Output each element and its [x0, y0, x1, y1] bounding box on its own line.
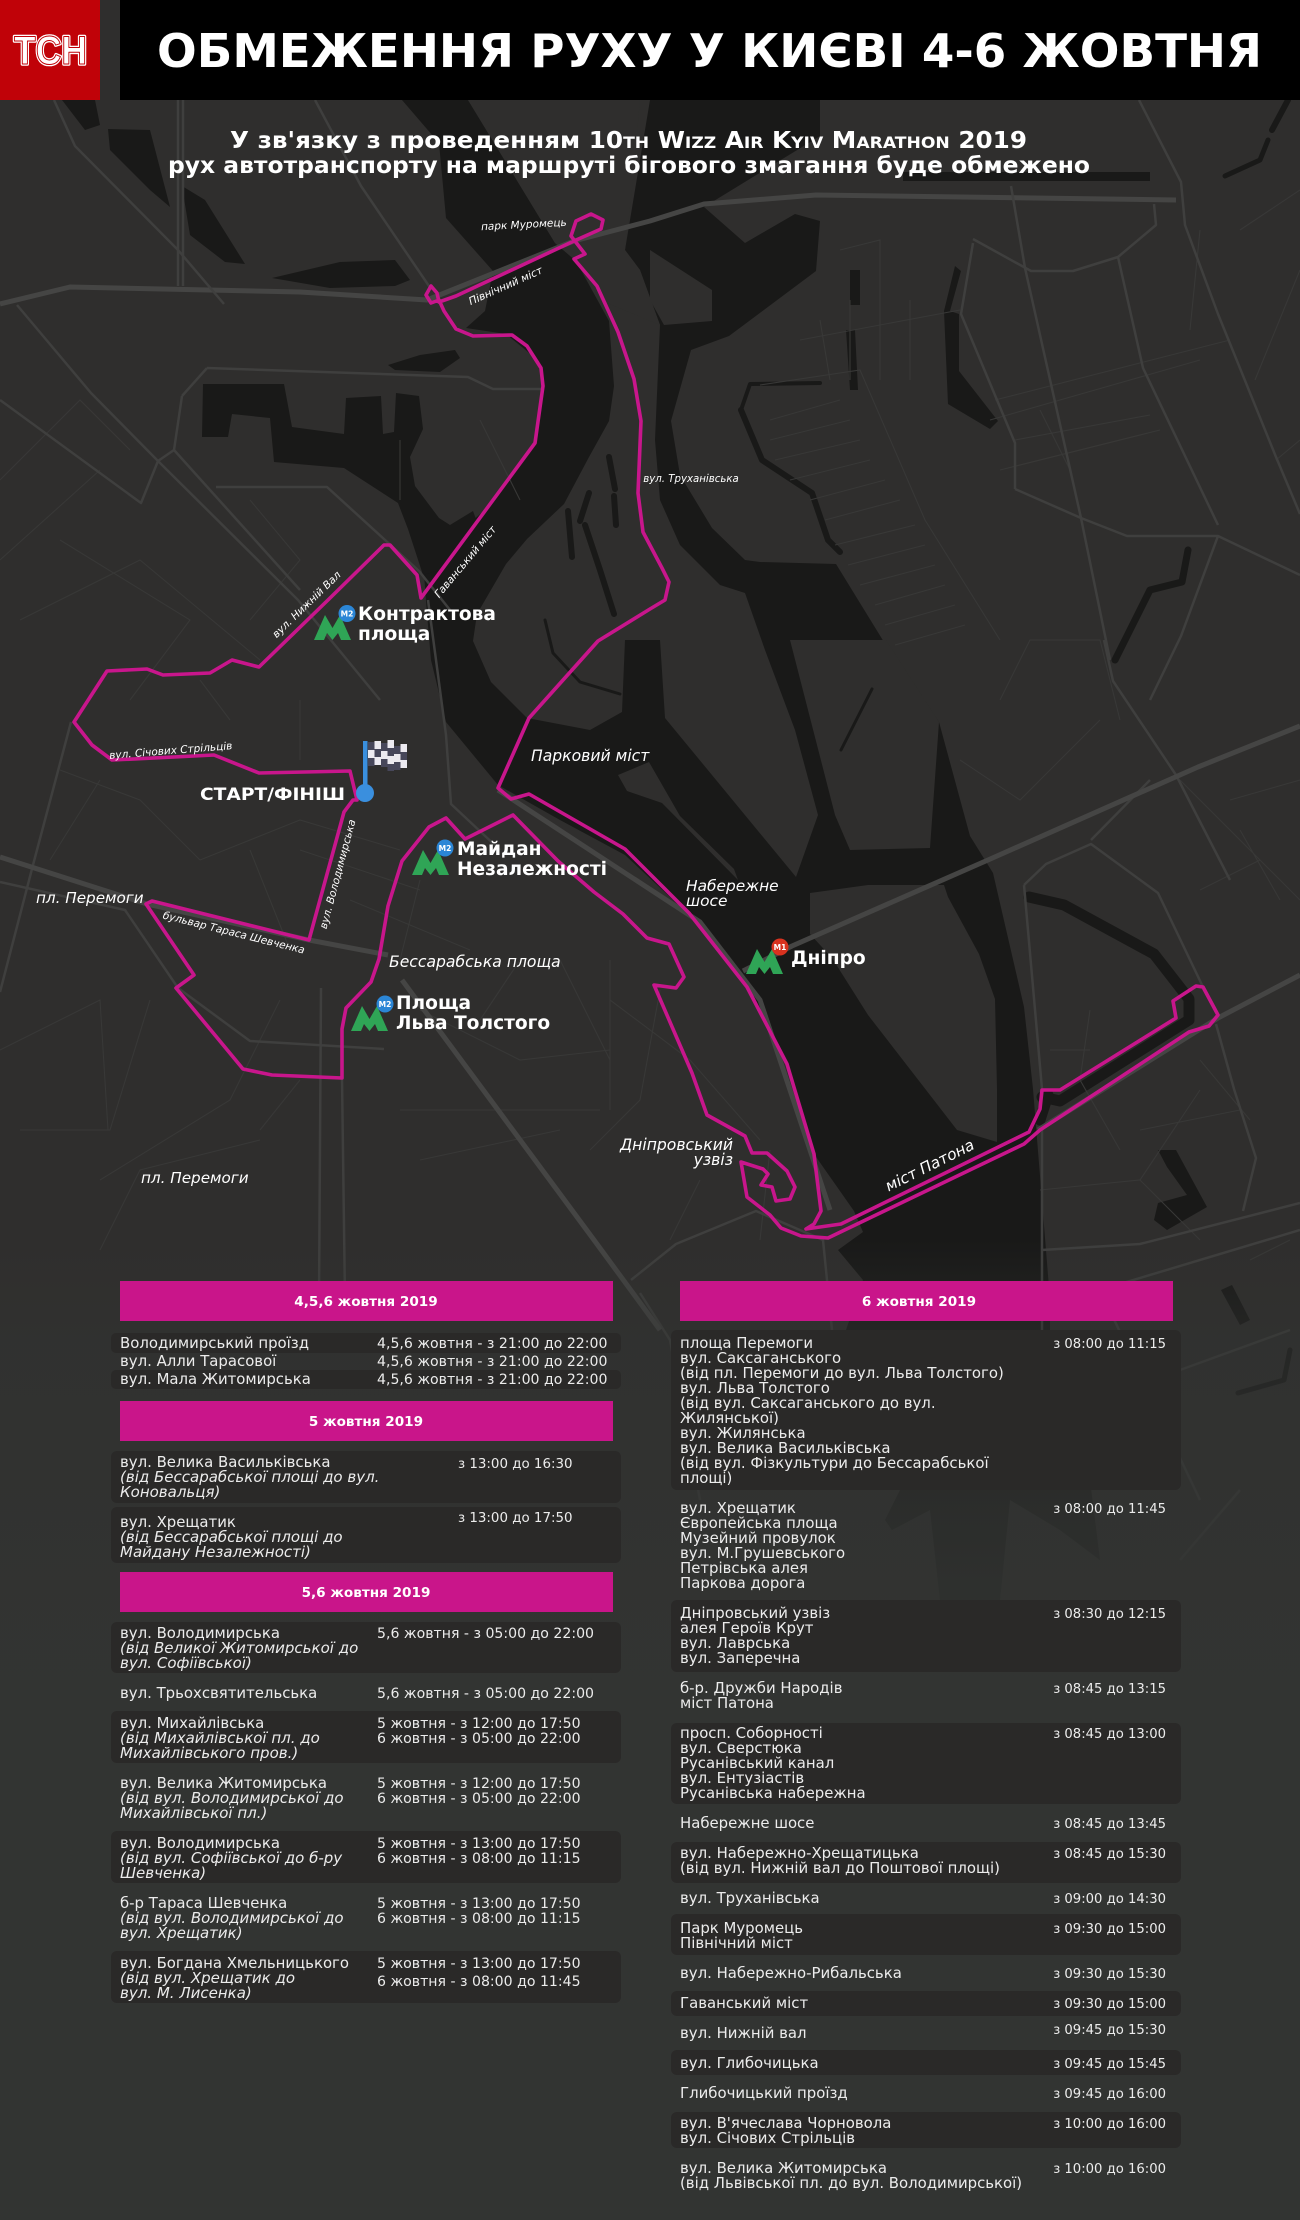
start / finish marker: [200, 740, 407, 805]
metro: Площа Льва Толстого: Площа: [396, 993, 471, 1014]
map street labels: [36, 217, 977, 1195]
table: 5,6 жовтня: 5 жовтня - з 12:00 до 17:50: [377, 1716, 581, 1732]
table: 6 жовтня: вул. Ентузіастів: [680, 1769, 804, 1787]
table: 5 жовтня: (від Бессарабської площі до вул.: [120, 1468, 379, 1486]
metro: Площа Льва Толстого: [351, 993, 550, 1034]
table: 6 жовтня: з 08:00 до 11:15: [1053, 1337, 1166, 1352]
table: 6 жовтня: з 08:45 до 13:45: [1053, 1817, 1166, 1832]
table: 5,6 жовтня: вул. Богдана Хмельницького: [120, 1954, 349, 1972]
table: 5 жовтня: з 13:00 до 17:50: [458, 1511, 573, 1526]
table: 5,6 жовтня: 5 жовтня - з 13:00 до 17:50: [377, 1896, 581, 1912]
metro: Контрактова площа: [314, 604, 496, 645]
metro: Контрактова площа: площа: [358, 624, 430, 645]
table: 6 жовтня: з 09:45 до 16:00: [1053, 2087, 1166, 2102]
table: 6 жовтня: (від вул. Нижній вал до Поштової площі): [680, 1859, 1000, 1877]
map street labels: парк Муромець: [481, 217, 567, 233]
table: 6 жовтня: вул. В'ячеслава Чорновола: [680, 2114, 891, 2132]
table: 6 жовтня: 6 жовтня 2019: [862, 1294, 976, 1310]
metro: Площа Льва Толстого: Льва Толстого: [396, 1013, 550, 1034]
table: 6 жовтня: б-р. Дружби Народів: [680, 1679, 842, 1697]
table: 5,6 жовтня: (від вул. Володимирської до: [120, 1909, 344, 1927]
table: 5,6 жовтня: (від Великої Житомирської до: [120, 1639, 358, 1657]
table: 6 жовтня: з 09:45 до 15:45: [1053, 2057, 1166, 2072]
table: 5,6 жовтня: вул. Трьохсвятительська: [120, 1684, 317, 1702]
map street labels: Дніпровський: [619, 1136, 733, 1154]
table: 5,6 жовтня: 5,6 жовтня - з 05:00 до 22:00: [377, 1686, 594, 1702]
table: 4,5,6 жовтня: [111, 1281, 621, 1389]
metro: Дніпро: Дніпро: [791, 948, 866, 969]
map street labels: вул. Нижній Вал: [270, 569, 344, 641]
start / finish marker: СТАРТ/ФІНІШ: [200, 785, 345, 805]
table: 6 жовтня: з 09:30 до 15:30: [1053, 1967, 1166, 1982]
table: 5 жовтня: Коновальця): [120, 1483, 220, 1501]
table: 6 жовтня: просп. Соборності: [680, 1724, 823, 1742]
subtitle: У зв'язку з проведенням 10 th Wizz Air Kyiv Marathon 2019: [230, 128, 1027, 154]
table: 5 жовтня: 5 жовтня 2019: [309, 1414, 423, 1430]
metro: Контрактова площа: Контрактова: [358, 604, 496, 625]
table: 6 жовтня: Набережне шосе: [680, 1814, 814, 1832]
islands over water: [468, 100, 997, 1142]
table: 5,6 жовтня: (від Михайлівської пл. до: [120, 1729, 320, 1747]
map street labels: Північний міст: [467, 264, 545, 308]
table: 6 жовтня: Парк Муромець: [680, 1919, 803, 1937]
header: TSN logo: [0, 0, 100, 100]
map street labels: міст Патона: [882, 1136, 977, 1195]
table: 5,6 жовтня: 6 жовтня - з 08:00 до 11:45: [377, 1974, 581, 1990]
table: 6 жовтня: Русанівська набережна: [680, 1784, 866, 1802]
table: 5,6 жовтня: Михайлівської пл.): [120, 1804, 267, 1822]
table: 6 жовтня: вул. Набережно-Хрещатицька: [680, 1844, 919, 1862]
table: 6 жовтня: з 09:30 до 15:00: [1053, 1922, 1166, 1937]
table: 6 жовтня: Європейська площа: [680, 1514, 838, 1532]
table: 5 жовтня: вул. Хрещатик: [120, 1513, 236, 1531]
table: 5,6 жовтня: 5,6 жовтня 2019: [302, 1585, 430, 1601]
table: 6 жовтня: Жилянської): [680, 1409, 779, 1427]
table: 5,6 жовтня: Шевченка): [120, 1864, 206, 1882]
metro: Майдан Незалежності: M2: [439, 844, 451, 853]
table: 4,5,6 жовтня: 4,5,6 жовтня - з 21:00 до 22:00: [377, 1372, 607, 1388]
table: 6 жовтня: вул. Велика Житомирська: [680, 2159, 887, 2177]
table: 5,6 жовтня: [111, 1572, 621, 2003]
table: 6 жовтня: з 08:45 до 15:30: [1053, 1847, 1166, 1862]
table: 6 жовтня: (від пл. Перемоги до вул. Льва Толстого): [680, 1364, 1004, 1382]
table: 5,6 жовтня: 5 жовтня - з 12:00 до 17:50: [377, 1776, 581, 1792]
metro: Дніпро: [746, 938, 866, 974]
table: 6 жовтня: Русанівський канал: [680, 1754, 834, 1772]
table: 5,6 жовтня: Михайлівського пров.): [120, 1744, 298, 1762]
table: 4,5,6 жовтня: 4,5,6 жовтня - з 21:00 до 22:00: [377, 1336, 607, 1352]
table: 6 жовтня: Гаванський міст: [680, 1994, 808, 2012]
table: 6 жовтня: (від вул. Саксаганського до вул.: [680, 1394, 936, 1412]
table: 6 жовтня: (від Львівської пл. до вул. Володимирської): [680, 2174, 1022, 2192]
table: 6 жовтня: з 09:30 до 15:00: [1053, 1997, 1166, 2012]
table: 6 жовтня: вул. Лаврська: [680, 1634, 790, 1652]
table: 6 жовтня: вул. Сверстюка: [680, 1739, 802, 1757]
metro: Майдан Незалежності: [412, 839, 607, 880]
table: 4,5,6 жовтня: 4,5,6 жовтня - з 21:00 до 22:00: [377, 1354, 607, 1370]
subtitle: рух автотранспорту на маршруті бігового змагання буде обмежено: [168, 153, 1090, 179]
table: 6 жовтня: з 09:00 до 14:30: [1053, 1892, 1166, 1907]
metro: Дніпро: M1: [774, 943, 786, 952]
table: 6 жовтня: з 08:45 до 13:00: [1053, 1727, 1166, 1742]
bottom fade overlay: [0, 1240, 1300, 2220]
table: 6 жовтня: площі): [680, 1469, 732, 1487]
table: 6 жовтня: Дніпровський узвіз: [680, 1604, 830, 1622]
table: 6 жовтня: алея Героїв Крут: [680, 1619, 814, 1637]
table: 6 жовтня: вул. Труханівська: [680, 1889, 820, 1907]
metro: Контрактова площа: M2: [341, 610, 353, 618]
table: 5,6 жовтня: 5,6 жовтня - з 05:00 до 22:00: [377, 1626, 594, 1642]
table: 6 жовтня: міст Патона: [680, 1694, 774, 1712]
table: 6 жовтня: Петрівська алея: [680, 1559, 808, 1577]
table: 5,6 жовтня: 5 жовтня - з 13:00 до 17:50: [377, 1956, 581, 1972]
table: 5 жовтня: Майдану Незалежності): [120, 1543, 311, 1561]
table: 6 жовтня: Музейний провулок: [680, 1529, 836, 1547]
metro: Площа Льва Толстого: M2: [379, 1000, 391, 1009]
metro: Майдан Незалежності: Незалежності: [457, 859, 607, 880]
header: TSN logo: ТСН: [14, 29, 87, 73]
table: 5,6 жовтня: вул. Софіївської): [120, 1654, 252, 1672]
table: 5,6 жовтня: (від вул. Хрещатик до: [120, 1969, 295, 1987]
table: 4,5,6 жовтня: Володимирський проїзд: [120, 1334, 309, 1352]
map street labels: вул. Володимирська: [318, 818, 358, 930]
map street labels: Бессарабська площа: [389, 953, 561, 971]
header: title: ОБМЕЖЕННЯ РУХУ У КИЄВІ 4-6 ЖОВТНЯ: [157, 24, 1262, 78]
table: 6 жовтня: вул. Жилянська: [680, 1424, 806, 1442]
table: 6 жовтня: вул. Заперечна: [680, 1649, 800, 1667]
map street labels: узвіз: [693, 1151, 733, 1169]
table: 6 жовтня: Паркова дорога: [680, 1574, 805, 1592]
table: 6 жовтня: з 09:45 до 15:30: [1053, 2023, 1166, 2038]
table: 5,6 жовтня: 6 жовтня - з 08:00 до 11:15: [377, 1911, 581, 1927]
map street labels: пл. Перемоги: [141, 1169, 249, 1187]
table: 5,6 жовтня: 6 жовтня - з 05:00 до 22:00: [377, 1731, 581, 1747]
table: 4,5,6 жовтня: вул. Мала Житомирська: [120, 1370, 311, 1388]
table: 6 жовтня: з 10:00 до 16:00: [1053, 2117, 1166, 2132]
table: 6 жовтня: з 08:30 до 12:15: [1053, 1607, 1166, 1622]
table: 6 жовтня: з 10:00 до 16:00: [1053, 2162, 1166, 2177]
map street labels: Гаванський міст: [432, 523, 500, 600]
table: 6 жовтня: Північний міст: [680, 1934, 793, 1952]
table: 6 жовтня: Глибочицький проїзд: [680, 2084, 848, 2102]
map street labels: вул. Труханівська: [643, 473, 739, 485]
table: 5 жовтня: [111, 1401, 621, 1563]
table: 4,5,6 жовтня: вул. Алли Тарасової: [120, 1352, 277, 1370]
table: 5,6 жовтня: вул. Володимирська: [120, 1834, 280, 1852]
table: 5 жовтня: вул. Велика Васильківська: [120, 1453, 330, 1471]
table: 5 жовтня: (від Бессарабської площі до: [120, 1528, 343, 1546]
table: 6 жовтня: з 08:45 до 13:15: [1053, 1682, 1166, 1697]
table: 4,5,6 жовтня: 4,5,6 жовтня 2019: [294, 1294, 438, 1310]
map street labels: пл. Перемоги: [36, 889, 144, 907]
table: 5,6 жовтня: 6 жовтня - з 08:00 до 11:15: [377, 1851, 581, 1867]
table: 5,6 жовтня: вул. Володимирська: [120, 1624, 280, 1642]
map street labels: Набережне: [686, 877, 779, 895]
table: 5,6 жовтня: вул. Велика Житомирська: [120, 1774, 327, 1792]
table: 6 жовтня: вул. Саксаганського: [680, 1349, 841, 1367]
subtitle: [168, 128, 1090, 179]
header: title: [120, 0, 1300, 100]
table: 6 жовтня: з 08:00 до 11:45: [1053, 1502, 1166, 1517]
table: 6 жовтня: вул. Набережно-Рибальська: [680, 1964, 902, 1982]
table: 5,6 жовтня: б-р Тараса Шевченка: [120, 1894, 287, 1912]
table: 6 жовтня: вул. М.Грушевського: [680, 1544, 845, 1562]
table: 6 жовтня: (від вул. Фізкультури до Бессарабської: [680, 1454, 989, 1472]
table: 5,6 жовтня: (від вул. Володимирської до: [120, 1789, 344, 1807]
table: 5,6 жовтня: 6 жовтня - з 05:00 до 22:00: [377, 1791, 581, 1807]
table: 6 жовтня: вул. Хрещатик: [680, 1499, 796, 1517]
table: 6 жовтня: вул. Нижній вал: [680, 2024, 807, 2042]
map street labels: бульвар Тараса Шевченка: [161, 910, 306, 957]
map street labels: вул. Січових Стрільців: [109, 740, 233, 762]
map street labels: Парковий міст: [531, 747, 650, 765]
metro: Майдан Незалежності: Майдан: [457, 839, 542, 860]
table: 6 жовтня: площа Перемоги: [680, 1334, 813, 1352]
table: 5,6 жовтня: вул. М. Лисенка): [120, 1984, 252, 2002]
marathon route: [74, 214, 1218, 1238]
table: 5,6 жовтня: вул. Хрещатик): [120, 1924, 243, 1942]
table: 6 жовтня: вул. Велика Васильківська: [680, 1439, 890, 1457]
table: 5,6 жовтня: вул. Михайлівська: [120, 1714, 264, 1732]
map street labels: шосе: [686, 892, 727, 910]
table: 5,6 жовтня: 5 жовтня - з 13:00 до 17:50: [377, 1836, 581, 1852]
table: 6 жовтня: вул. Січових Стрільців: [680, 2129, 855, 2147]
table: 6 жовтня: вул. Глибочицька: [680, 2054, 819, 2072]
table: 6 жовтня: вул. Льва Толстого: [680, 1379, 830, 1397]
table: 6 жовтня: [671, 1281, 1181, 2192]
table: 5 жовтня: з 13:00 до 16:30: [458, 1457, 573, 1472]
table: 5,6 жовтня: (від вул. Софіївської до б-ру: [120, 1849, 343, 1867]
header: TSN logo: ТСН: [14, 29, 87, 73]
